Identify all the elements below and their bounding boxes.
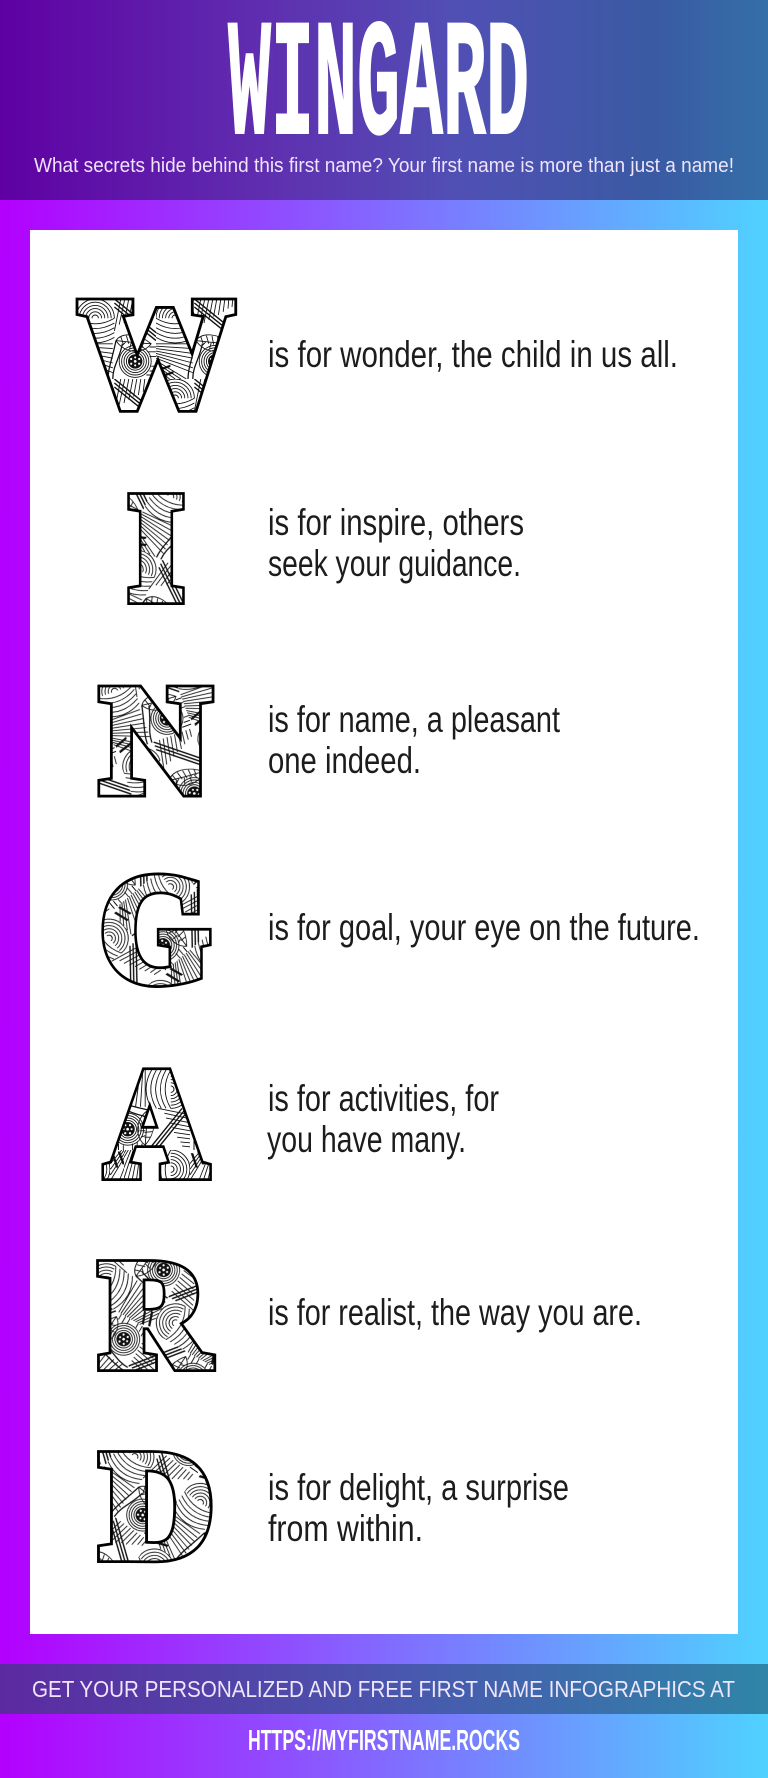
row A (106, 1039, 499, 1207)
text: A lines: you have many. (267, 1119, 466, 1160)
icon: patterned letter I: I (129, 463, 183, 631)
text: A lines: is for activities, for (268, 1078, 499, 1119)
header band (0, 0, 768, 200)
footer url: HTTPS://MYFIRSTNAME.ROCKS (248, 1725, 520, 1757)
icon: patterned letter A: A (106, 1039, 206, 1207)
icon: patterned letter A: A (106, 1039, 206, 1207)
row N (102, 656, 561, 824)
text: W line: is for wonder, the child in us all. (268, 334, 678, 375)
text: A lines (267, 1078, 499, 1160)
row G (101, 844, 700, 1012)
footer band (0, 1664, 768, 1714)
text: D lines: from within. (268, 1508, 423, 1549)
row W (80, 268, 678, 436)
icon: patterned letter R: R (100, 1230, 210, 1398)
text: R line: is for realist, the way you are. (268, 1292, 642, 1333)
icon: patterned letter I: I (129, 463, 183, 631)
icon: patterned letter N: N (102, 656, 210, 824)
text: D lines (268, 1467, 569, 1549)
icon: patterned letter W: W (80, 268, 232, 436)
text: N lines: one indeed. (268, 740, 421, 781)
row R (100, 1230, 642, 1398)
subtitle: What secrets hide behind this first name? Your first name is more than just a name! (34, 155, 734, 177)
text: I lines: is for inspire, others (268, 502, 524, 543)
icon: patterned letter N: N (102, 656, 210, 824)
text: N lines (268, 699, 561, 781)
row I (129, 463, 524, 631)
icon: patterned letter G: G (101, 844, 209, 1012)
icon: patterned letter R: R (100, 1230, 210, 1398)
text: D lines: is for delight, a surprise (268, 1467, 569, 1508)
text: I lines: seek your guidance. (268, 543, 521, 584)
text: N lines: is for name, a pleasant (268, 699, 561, 740)
icon: patterned letter D: D (102, 1421, 213, 1589)
panel: white letter list (30, 230, 738, 1634)
icon: patterned letter G: G (101, 844, 209, 1012)
text: I lines (268, 502, 524, 584)
icon: patterned letter D: D (102, 1421, 213, 1589)
row D (102, 1421, 569, 1589)
icon: patterned letter W: W (80, 268, 232, 436)
